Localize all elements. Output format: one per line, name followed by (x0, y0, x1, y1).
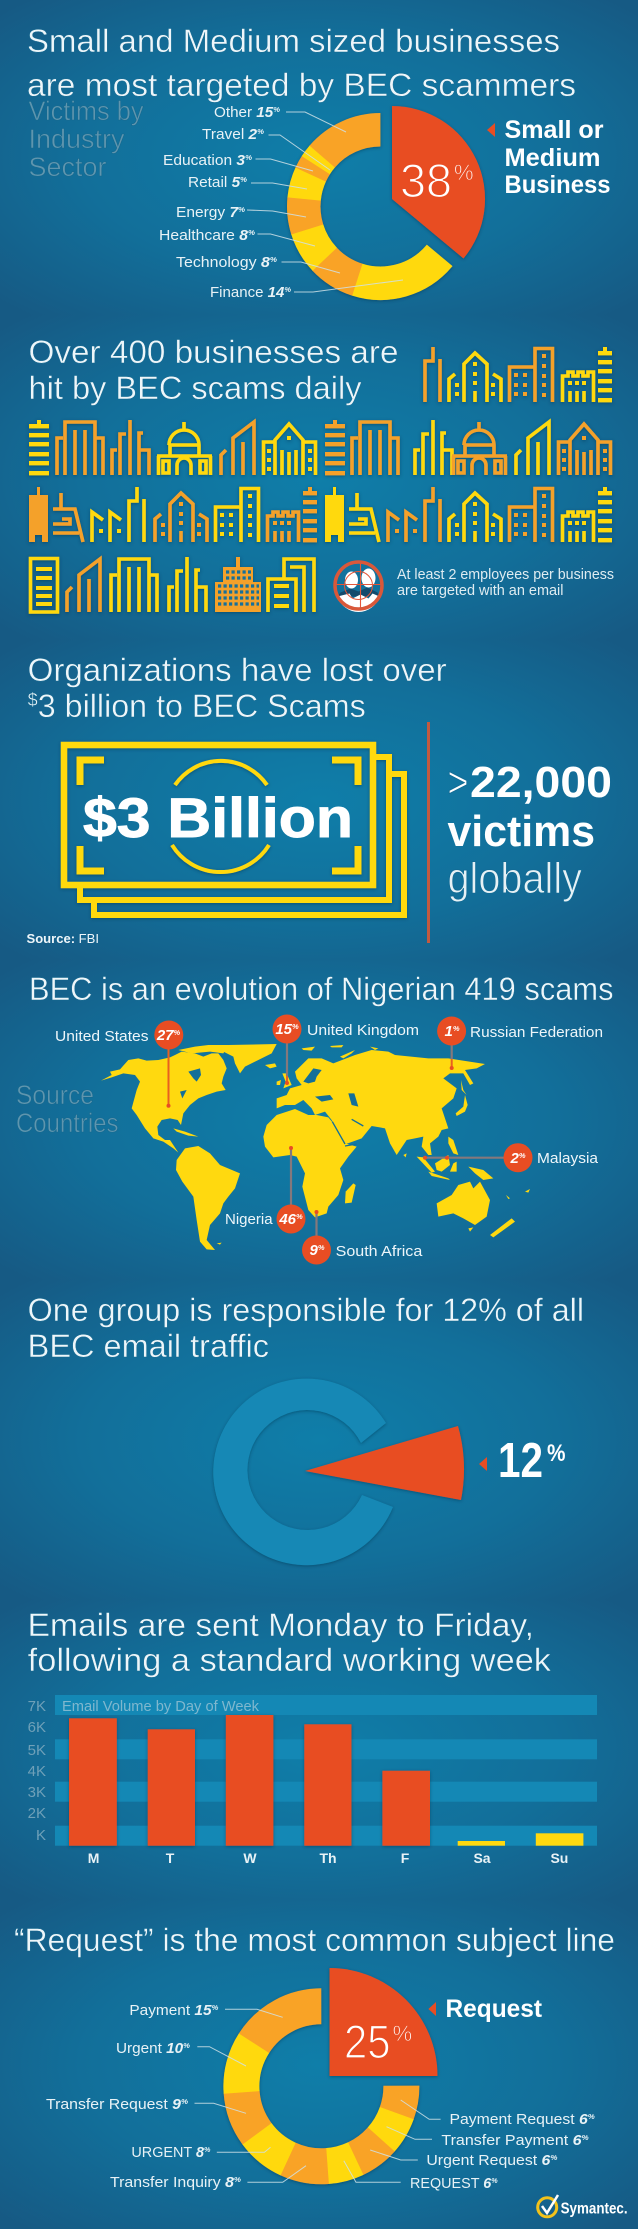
sector labels and leader lines: % (257, 127, 264, 136)
callout: 12 percent: 12 (498, 1434, 543, 1488)
map pin: Nigeria 46 percent: % (296, 1212, 303, 1221)
panel: email volume by day (0, 1600, 638, 1900)
sector labels and leader lines: Other 15 (214, 104, 273, 121)
map pin: United Kingdom 15 percent (272, 1014, 419, 1085)
x axis labels (88, 1850, 568, 1866)
sector labels and leader lines: Education 3 (163, 152, 245, 169)
subtitle: victims by industry sector: Sector (28, 152, 107, 182)
heading: organizations have lost: $ (28, 690, 38, 710)
subject labels and leader lines: % (204, 2145, 211, 2154)
logo: Symantec (538, 2195, 628, 2217)
map pin: United States 27 percent: % (174, 1028, 181, 1037)
heading: one group 12 percent: One group is responsible for 12% of all (28, 1292, 584, 1328)
subtitle: victims by industry sector: Industry (28, 124, 125, 154)
stat: 22,000 victims globally: globally (448, 854, 582, 903)
map pin: South Africa 9 percent (302, 1210, 423, 1264)
text: employees targeted (397, 566, 614, 599)
sector labels and leader lines: % (248, 228, 255, 237)
donut slice: 38 percent: 38 (400, 154, 452, 207)
map pin: United States 27 percent (55, 1020, 183, 1108)
map pin: Malaysia 2 percent: Malaysia (537, 1150, 599, 1167)
map pin: Malaysia 2 percent (423, 1143, 599, 1172)
divider line (427, 722, 430, 943)
y axis labels: 2K (28, 1805, 46, 1822)
x axis labels: W (243, 1850, 257, 1866)
sector labels and leader lines: % (245, 153, 252, 162)
heading: one group 12 percent (28, 1292, 584, 1364)
heading: over 400 businesses (28, 334, 398, 406)
map pin: Nigeria 46 percent (225, 1146, 306, 1234)
x axis labels: Th (319, 1850, 337, 1866)
donut slice: 38 percent (392, 106, 485, 258)
callout: small or medium business: Business (504, 171, 610, 199)
map pin: South Africa 9 percent: % (318, 1243, 325, 1252)
subject labels and leader lines: Transfer Request 9 (46, 2096, 180, 2113)
map pin: South Africa 9 percent: South Africa (336, 1243, 423, 1260)
text: employees targeted: are targeted with an email (397, 582, 564, 599)
callout: request: Request (446, 1995, 543, 2023)
heading: emails sent Monday to Friday: Emails are sent Monday to Friday, (28, 1607, 534, 1643)
sector labels and leader lines: % (238, 205, 245, 214)
subject labels and leader lines: Payment 15 (129, 2002, 211, 2019)
heading: small and medium businesses (27, 23, 576, 103)
map pin: Russian Federation 1 percent: 1 (444, 1023, 453, 1040)
donut slice: 25 percent: 25 (344, 2015, 390, 2068)
sector labels and leader lines: Healthcare 8 (159, 227, 248, 244)
y axis labels (28, 1698, 46, 1844)
bars: weekend (458, 1833, 583, 1846)
heading: emails sent Monday to Friday: following a standard working week (28, 1642, 552, 1678)
callout: small or medium business (487, 116, 610, 199)
map pin: United States 27 percent: 27 (156, 1027, 174, 1044)
sector labels and leader lines: Retail 5 (188, 174, 240, 191)
sector labels and leader lines: Technology 8 (176, 254, 269, 271)
sector labels and leader lines: Finance 14 (210, 284, 284, 301)
donut chart: subject lines (208, 1973, 434, 2199)
subject labels and leader lines: Transfer Inquiry 8 (110, 2174, 233, 2191)
source: FBI: Source: FBI (26, 931, 99, 946)
sector labels and leader lines: Energy 7 (176, 204, 238, 221)
callout: small or medium business: Small or (504, 116, 604, 144)
x axis labels: Su (550, 1850, 568, 1866)
x axis labels: F (401, 1850, 410, 1866)
subject labels and leader lines: Urgent Request 6 (426, 2152, 550, 2169)
map pin: South Africa 9 percent: 9 (309, 1242, 318, 1259)
heading: evolution of Nigerian 419 scams: BEC is an evolution of Nigerian 419 scams (29, 971, 614, 1007)
heading: organizations have lost: 3 billion to BEC Scams (38, 688, 366, 724)
map pin: United Kingdom 15 percent: United Kingdom (307, 1022, 419, 1039)
heading: emails sent Monday to Friday (28, 1607, 552, 1678)
panel: 3 billion lost (0, 640, 638, 960)
sector labels and leader lines: % (284, 285, 291, 294)
subject labels and leader lines: REQUEST 6 (410, 2175, 492, 2192)
donut slice: 25 percent (330, 1968, 438, 2076)
chart label: Email Volume by Day of Week (62, 1698, 259, 1715)
callout: 12 percent: % (547, 1440, 566, 1467)
x axis labels: M (88, 1850, 99, 1866)
text: employees targeted: At least 2 employees per business (397, 566, 614, 583)
donut slice: 12 percent (305, 1426, 464, 1500)
world map (101, 1044, 530, 1250)
map pin: Malaysia 2 percent: % (519, 1151, 526, 1160)
subject labels and leader lines: % (582, 2133, 589, 2142)
y axis labels: 3K (28, 1784, 46, 1801)
panel: source countries (0, 960, 638, 1280)
x axis labels: Sa (473, 1850, 491, 1866)
subject labels and leader lines (46, 2002, 595, 2192)
subject labels and leader lines: % (491, 2176, 498, 2185)
panel: common subject lines (0, 1900, 638, 2229)
heading: organizations have lost (28, 652, 447, 724)
bars: weekdays (69, 1715, 430, 1846)
x axis labels: T (166, 1850, 175, 1866)
subject labels and leader lines: Payment Request 6 (450, 2111, 587, 2128)
figure: 3 billion: $3 Billion (83, 786, 353, 849)
map pin: United States 27 percent: United States (55, 1028, 148, 1045)
callout: 12 percent (479, 1434, 566, 1488)
donut chart: sectors (272, 98, 489, 315)
map pin: Russian Federation 1 percent (437, 1016, 603, 1070)
map pin: Nigeria 46 percent: Nigeria (225, 1211, 273, 1228)
donut slice: 25 percent: % (393, 2021, 412, 2046)
stat: 22,000 victims globally: 22,000 (470, 758, 612, 807)
sector labels and leader lines: % (240, 175, 247, 184)
sector labels and leader lines (159, 104, 403, 301)
donut chart: remaining traffic (213, 1379, 393, 1565)
subject labels and leader lines: Urgent 10 (116, 2040, 183, 2057)
stat: 22,000 victims globally: > (448, 758, 468, 807)
map pin: Russian Federation 1 percent: % (453, 1024, 460, 1033)
subject labels and leader lines: % (212, 2003, 219, 2012)
sector labels and leader lines: % (273, 105, 280, 114)
subject labels and leader lines: % (588, 2112, 595, 2121)
y axis labels: 5K (28, 1742, 46, 1759)
subject labels and leader lines: % (234, 2175, 241, 2184)
sector labels and leader lines: Travel 2 (202, 126, 257, 143)
y axis labels: K (36, 1827, 46, 1844)
subject labels and leader lines: % (183, 2041, 190, 2050)
subtitle: source countries: Source (16, 1080, 94, 1110)
donut slice: 38 percent: % (454, 160, 474, 185)
icon: targeted employees (334, 562, 382, 612)
map pin: Malaysia 2 percent: 2 (509, 1150, 519, 1167)
heading: request most common: “Request” is the most common subject line (14, 1922, 615, 1958)
icon: stack of banknotes (64, 745, 404, 915)
sector labels and leader lines: % (270, 255, 277, 264)
map pin: United Kingdom 15 percent: 15 (275, 1021, 293, 1038)
heading: over 400 businesses: hit by BEC scams daily (28, 370, 362, 406)
subtitle: victims by industry sector (28, 96, 144, 182)
callout: small or medium business: Medium (504, 144, 600, 172)
subject labels and leader lines: URGENT 8 (131, 2144, 204, 2161)
subtitle: source countries: Countries (16, 1108, 118, 1138)
subject labels and leader lines: % (181, 2097, 188, 2106)
map pin: Russian Federation 1 percent: Russian Federation (470, 1024, 603, 1041)
y axis labels: 6K (28, 1719, 46, 1736)
subtitle: victims by industry sector: Victims by (28, 96, 144, 126)
stat: 22,000 victims globally: victims (448, 807, 595, 856)
y axis labels: 7K (28, 1698, 46, 1715)
panel: victims by industry sector (0, 0, 638, 315)
subtitle: source countries (16, 1080, 118, 1138)
heading: small and medium businesses: are most targeted by BEC scammers (27, 67, 576, 103)
heading: small and medium businesses: Small and Medium sized businesses (27, 23, 560, 59)
map pin: Nigeria 46 percent: 46 (278, 1211, 297, 1228)
heading: organizations have lost: Organizations have lost over (28, 652, 447, 688)
map pin: United Kingdom 15 percent: % (292, 1022, 299, 1031)
subject labels and leader lines: Transfer Payment 6 (441, 2132, 581, 2149)
panel: one group responsible (0, 1280, 638, 1600)
city skyline: row of buildings (29, 347, 612, 612)
bar chart (28, 1695, 597, 1866)
heading: one group 12 percent: BEC email traffic (28, 1328, 269, 1364)
heading: over 400 businesses: Over 400 businesses are (28, 334, 398, 370)
y axis labels: 4K (28, 1763, 46, 1780)
stat: 22,000 victims globally (448, 758, 612, 903)
panel: businesses hit daily (0, 315, 638, 640)
subject labels and leader lines: % (550, 2153, 558, 2162)
